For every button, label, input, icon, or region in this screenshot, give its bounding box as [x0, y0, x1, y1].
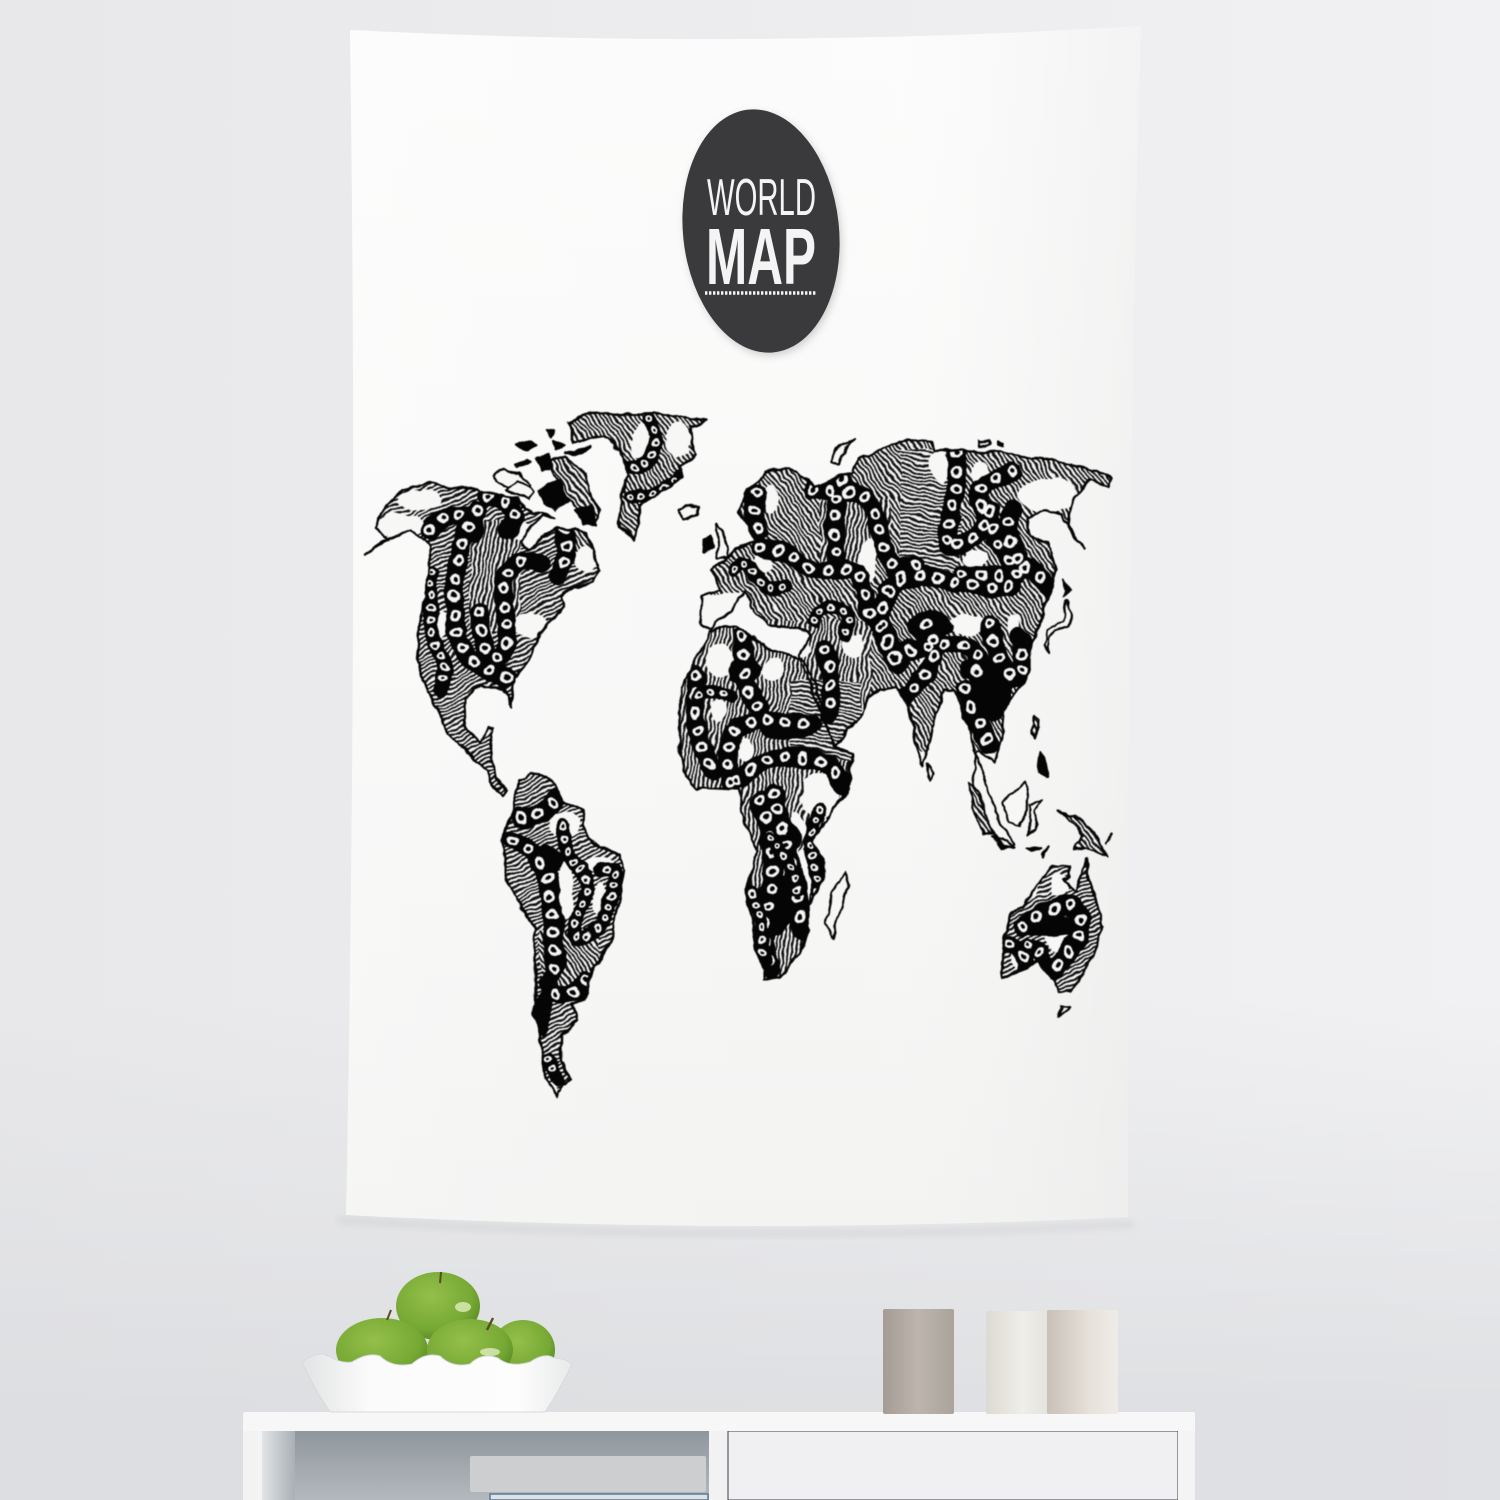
sideboard cabinet	[243, 1412, 1195, 1500]
tentacle bands	[430, 420, 1081, 1078]
bowl of green apples	[302, 1272, 572, 1412]
candle: beige	[1047, 1310, 1118, 1414]
open compartment	[262, 1428, 710, 1500]
white scalloped bowl	[302, 1354, 572, 1412]
title text: MAP: MAP	[706, 212, 816, 301]
apple: right	[491, 1320, 555, 1380]
islands	[495, 428, 1112, 1018]
dark ink masses	[466, 500, 1080, 1036]
right post	[1178, 1428, 1195, 1500]
door	[728, 1431, 1178, 1500]
world map illustration	[350, 400, 1130, 1110]
book: grey hardback	[470, 1456, 706, 1492]
title badge: World Map	[671, 102, 853, 363]
apple: top	[396, 1272, 480, 1340]
left post	[243, 1428, 262, 1500]
white land areas	[375, 422, 1100, 1102]
tapestry cloth	[338, 26, 1141, 1236]
pillar candles	[883, 1309, 1118, 1414]
candle: ivory	[986, 1311, 1048, 1414]
shelf top	[243, 1412, 1195, 1431]
candle: taupe	[883, 1309, 954, 1414]
center post	[709, 1428, 728, 1500]
dotted rule	[705, 291, 817, 295]
book: blue-edged stack	[490, 1494, 708, 1500]
continent outlines	[365, 413, 1110, 1097]
apple: center	[427, 1319, 513, 1381]
title text: WORLD: WORLD	[707, 169, 816, 227]
land hatching	[378, 413, 1110, 1092]
apple: left	[336, 1318, 428, 1382]
